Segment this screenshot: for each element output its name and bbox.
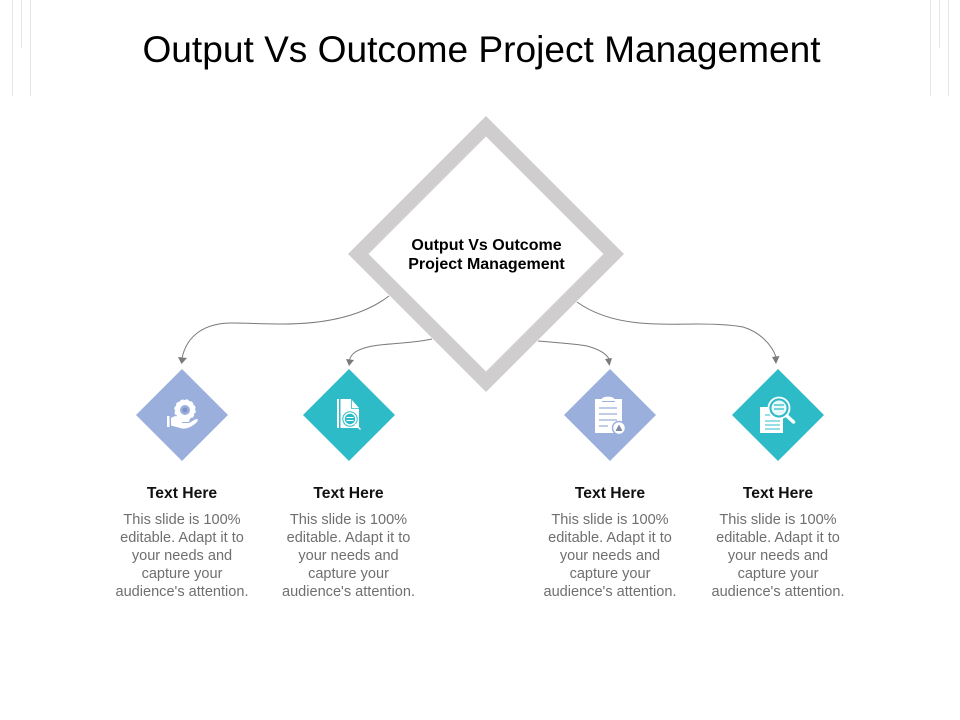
center label: Project Management [408, 256, 565, 273]
text block 3: This slide is 100% [551, 512, 669, 528]
icon diamond 1: hand with gear [136, 369, 228, 461]
text block 1: capture your [142, 566, 222, 582]
icon: document with magnifier [337, 399, 360, 430]
text block 2: capture your [308, 566, 389, 582]
text block 4: Text Here [743, 485, 813, 502]
icon diamond 2: document search [303, 369, 395, 461]
text block 4: audience's attention. [712, 584, 844, 600]
text block 1: Text Here [147, 485, 217, 502]
arrow: center to item 3 [538, 341, 612, 366]
text block 1: audience's attention. [116, 584, 248, 600]
text block 3: editable. Adapt it to [548, 530, 672, 546]
text block 3: capture your [570, 566, 650, 582]
arrow: center to item 1 [178, 296, 389, 364]
text block 1: This slide is 100% [123, 512, 241, 528]
text block 1 [116, 485, 248, 600]
text block 2: editable. Adapt it to [287, 530, 410, 546]
text block 2: audience's attention. [282, 584, 415, 600]
text block 4: editable. Adapt it to [716, 530, 840, 546]
text block 2: Text Here [313, 485, 384, 502]
icon: clipboard with badge [595, 397, 626, 434]
text block 1: your needs and [132, 548, 232, 564]
text block 3: Text Here [575, 485, 645, 502]
text block 2: your needs and [298, 548, 399, 564]
arrow: center to item 4 [577, 302, 780, 364]
icon diamond 4: document magnifier [732, 369, 824, 461]
text block 4: your needs and [728, 548, 828, 564]
center label: Output Vs Outcome [411, 237, 562, 254]
text block 3: audience's attention. [544, 584, 676, 600]
text block 2: This slide is 100% [290, 512, 407, 528]
arrow: center to item 2 [346, 339, 432, 366]
icon: magnifier over document [760, 398, 794, 433]
icon diamond 3: clipboard [564, 369, 656, 461]
text block 2 [282, 485, 415, 600]
center label [408, 237, 565, 273]
text block 3 [544, 485, 676, 600]
text block 4 [712, 485, 844, 600]
text block 1: editable. Adapt it to [120, 530, 244, 546]
icon: hand holding gear [167, 400, 198, 429]
text block 3: your needs and [560, 548, 660, 564]
title: Output Vs Outcome Project Management [142, 28, 821, 70]
text block 4: This slide is 100% [719, 512, 837, 528]
text block 4: capture your [738, 566, 818, 582]
central diamond frame [348, 116, 624, 392]
